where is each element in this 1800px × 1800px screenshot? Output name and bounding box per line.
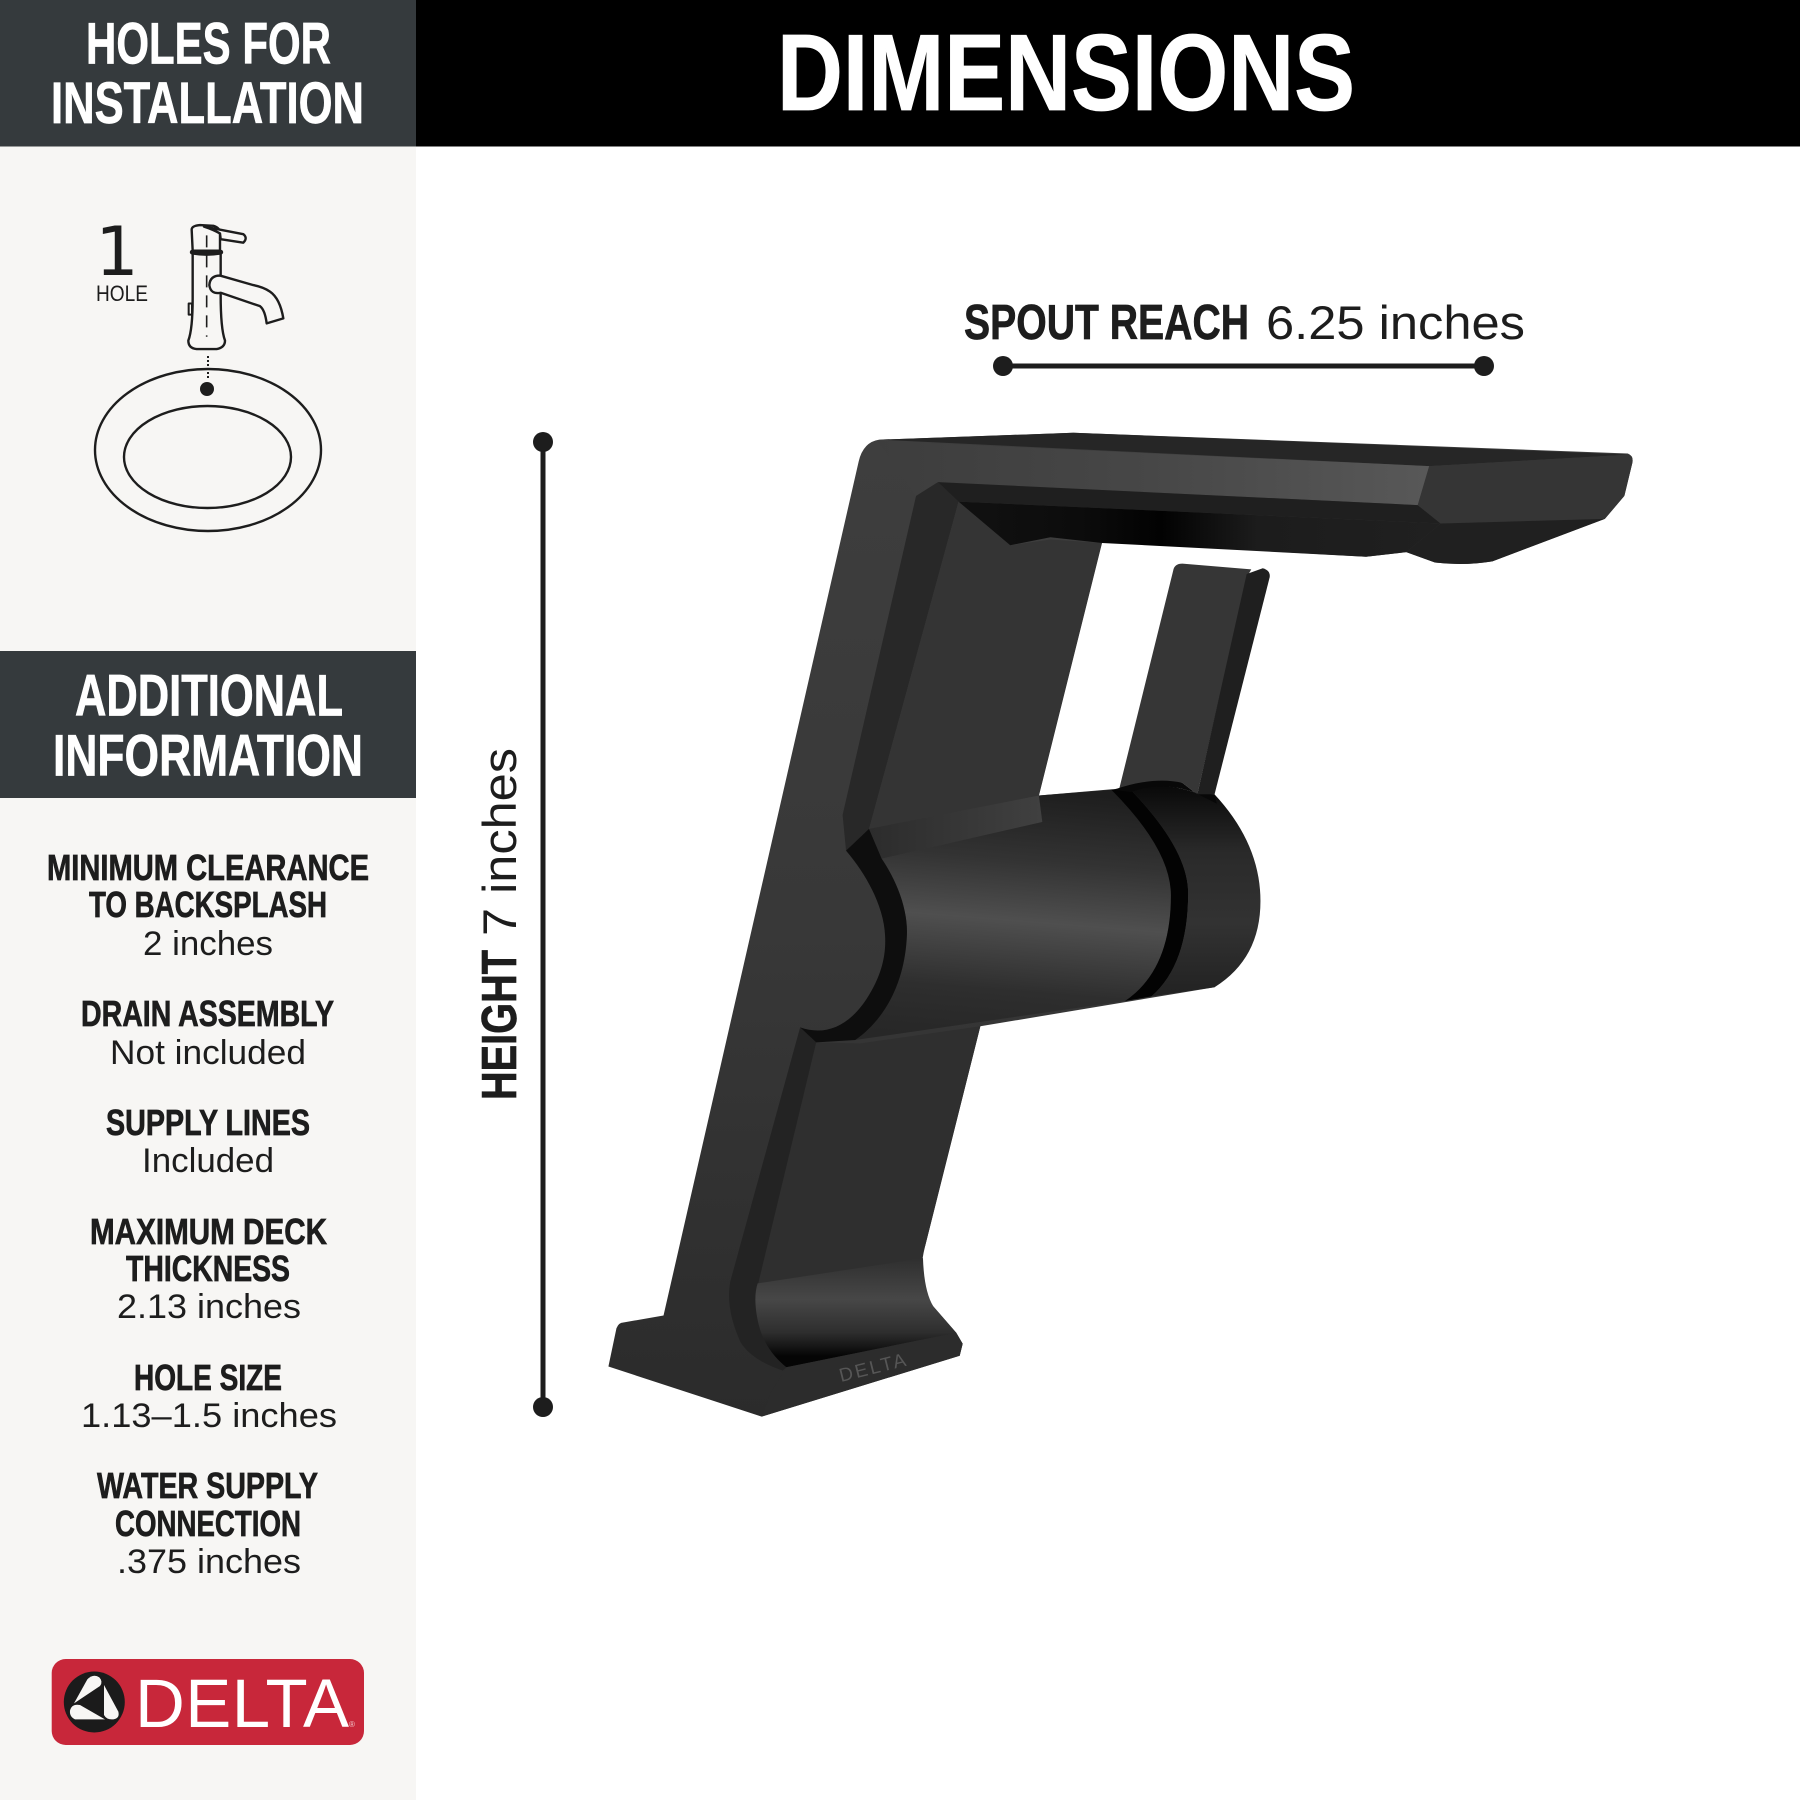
- dimension: spout reach: SPOUT REACH: [964, 296, 1249, 350]
- spec: minimum clearance to backsplash: [47, 847, 369, 963]
- spec: water supply connection: WATER SUPPLY: [97, 1465, 318, 1506]
- base front edge: [762, 1333, 963, 1417]
- dimension: spout reach: 6.25 inches: [1266, 296, 1525, 349]
- dimension: height: 7 inches: [473, 748, 526, 936]
- lower stem bevel: [729, 1027, 816, 1371]
- faucet silhouette and spine: [608, 433, 1633, 1417]
- spec: hole size: HOLE SIZE: [134, 1357, 282, 1398]
- icon: sink basin with hole: [95, 356, 321, 531]
- logo: delta: ®: [349, 1720, 355, 1729]
- spout top surface: [879, 433, 1630, 466]
- heading: additional information: ADDITIONAL: [75, 664, 343, 728]
- faucet product illustration: [608, 433, 1633, 1417]
- title band: dimensions: DIMENSIONS: [777, 12, 1355, 134]
- spec: hole size: [81, 1357, 337, 1435]
- heading: holes for installation: [0, 0, 416, 146]
- spec: drain assembly: DRAIN ASSEMBLY: [81, 993, 334, 1034]
- heading: additional information: INFORMATION: [53, 724, 363, 788]
- dimension: height: [473, 432, 553, 1417]
- spec: minimum clearance to backsplash: 2 inches: [143, 925, 273, 963]
- spout end underside: [1406, 519, 1605, 564]
- spout front strip: [877, 441, 1429, 505]
- spec: supply lines: Included: [142, 1142, 274, 1180]
- lever base shadow: [1114, 781, 1217, 804]
- handle cap: [1131, 786, 1260, 996]
- icon: faucet line drawing: [188, 225, 283, 349]
- title band: dimensions: [416, 0, 1800, 146]
- spec: maximum deck thickness: [90, 1211, 327, 1326]
- spec: minimum clearance to backsplash: TO BACKSPLASH: [89, 884, 327, 925]
- spout underside: [959, 502, 1441, 557]
- spec: maximum deck thickness: 2.13 inches: [117, 1288, 301, 1326]
- dimension: height: HEIGHT: [473, 950, 527, 1100]
- spec: drain assembly: Not included: [110, 1034, 306, 1072]
- heading: additional information: [0, 651, 416, 798]
- base fillet: [755, 1258, 956, 1367]
- spec: water supply connection: [97, 1465, 318, 1581]
- logo: delta: DELTA: [135, 1665, 349, 1742]
- left sidebar panel: [0, 0, 416, 1800]
- spout end face: [1418, 455, 1633, 523]
- black collar crescent: [800, 829, 907, 1042]
- lever edge: [1197, 568, 1270, 794]
- spec: water supply connection: .375 inches: [117, 1543, 301, 1581]
- handle body: [855, 790, 1171, 1040]
- spec: minimum clearance to backsplash: MINIMUM CLEARANCE: [47, 847, 369, 888]
- text: delta mark on base: DELTA: [837, 1350, 908, 1387]
- spec: supply lines: [106, 1102, 310, 1180]
- logo: delta: [52, 1659, 364, 1745]
- lower stem back panel: [758, 1026, 980, 1286]
- spec: maximum deck thickness: MAXIMUM DECK: [90, 1211, 327, 1252]
- heading: holes for installation: INSTALLATION: [51, 71, 364, 136]
- icon: one-hole count label: 1: [95, 213, 139, 292]
- spec: supply lines: SUPPLY LINES: [106, 1102, 310, 1143]
- neck panel: [869, 502, 1102, 859]
- heading: holes for installation: HOLES FOR: [86, 12, 331, 76]
- neck bevel: [843, 482, 959, 851]
- dimension: spout reach: [964, 296, 1525, 376]
- spec: hole size: 1.13–1.5 inches: [81, 1397, 337, 1435]
- icon: one-hole count label: HOLE: [96, 281, 148, 306]
- handle gap ring: [1111, 790, 1188, 1001]
- spout inner band: [938, 482, 1441, 523]
- spec: water supply connection: CONNECTION: [115, 1503, 301, 1544]
- spec: drain assembly: [81, 993, 334, 1072]
- lever blade: [1119, 564, 1251, 794]
- icon: one-hole count label: [95, 213, 148, 306]
- spec: maximum deck thickness: THICKNESS: [126, 1248, 290, 1289]
- neck lower lip: [869, 796, 1042, 859]
